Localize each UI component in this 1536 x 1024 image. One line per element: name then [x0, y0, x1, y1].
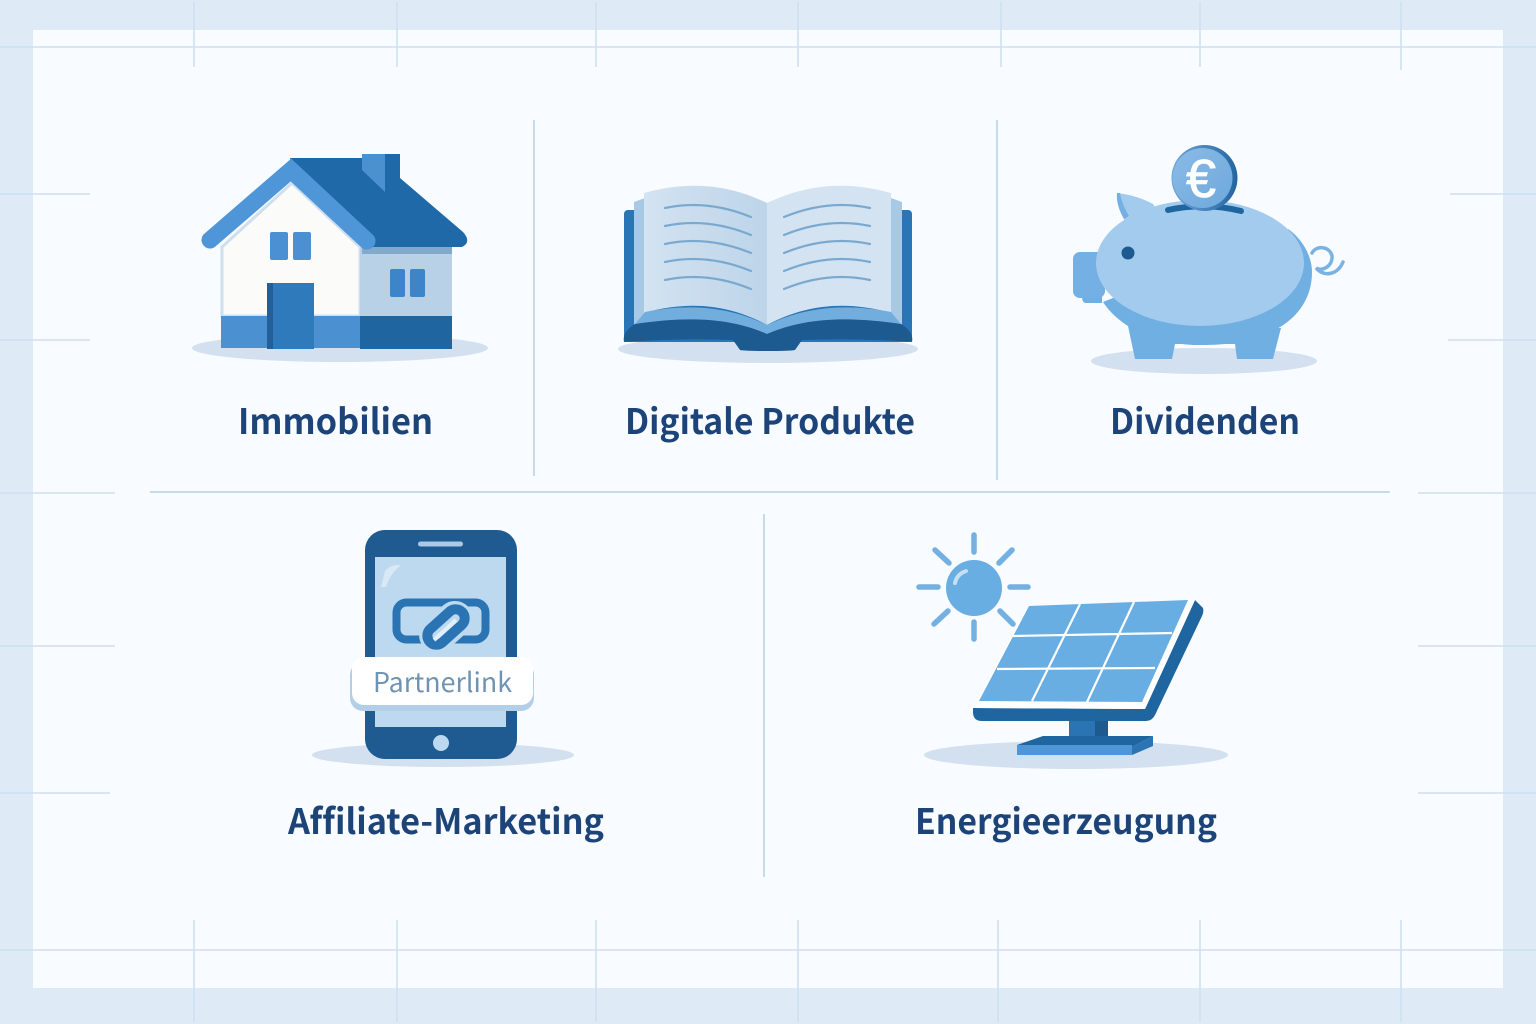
callout: Partnerlink: Partnerlink — [373, 661, 512, 700]
euro sign: € — [1186, 149, 1216, 209]
label: Digitale Produkte: Digitale Produkte — [625, 394, 915, 445]
callout: Partnerlink — [352, 657, 533, 705]
label: Energieerzeugung: Energieerzeugung — [915, 794, 1217, 845]
icon: chain link — [396, 602, 486, 649]
label: Immobilien: Immobilien — [238, 394, 433, 445]
label: Dividenden: Dividenden — [1110, 394, 1300, 445]
label: Affiliate-Marketing: Affiliate-Marketing — [287, 794, 604, 845]
icon: house — [192, 154, 488, 362]
icon: open book — [618, 186, 918, 363]
icon: smartphone with partner link — [312, 530, 574, 767]
icon: piggy bank with euro coin — [1073, 145, 1343, 374]
icon: solar panel with sun — [919, 535, 1228, 769]
